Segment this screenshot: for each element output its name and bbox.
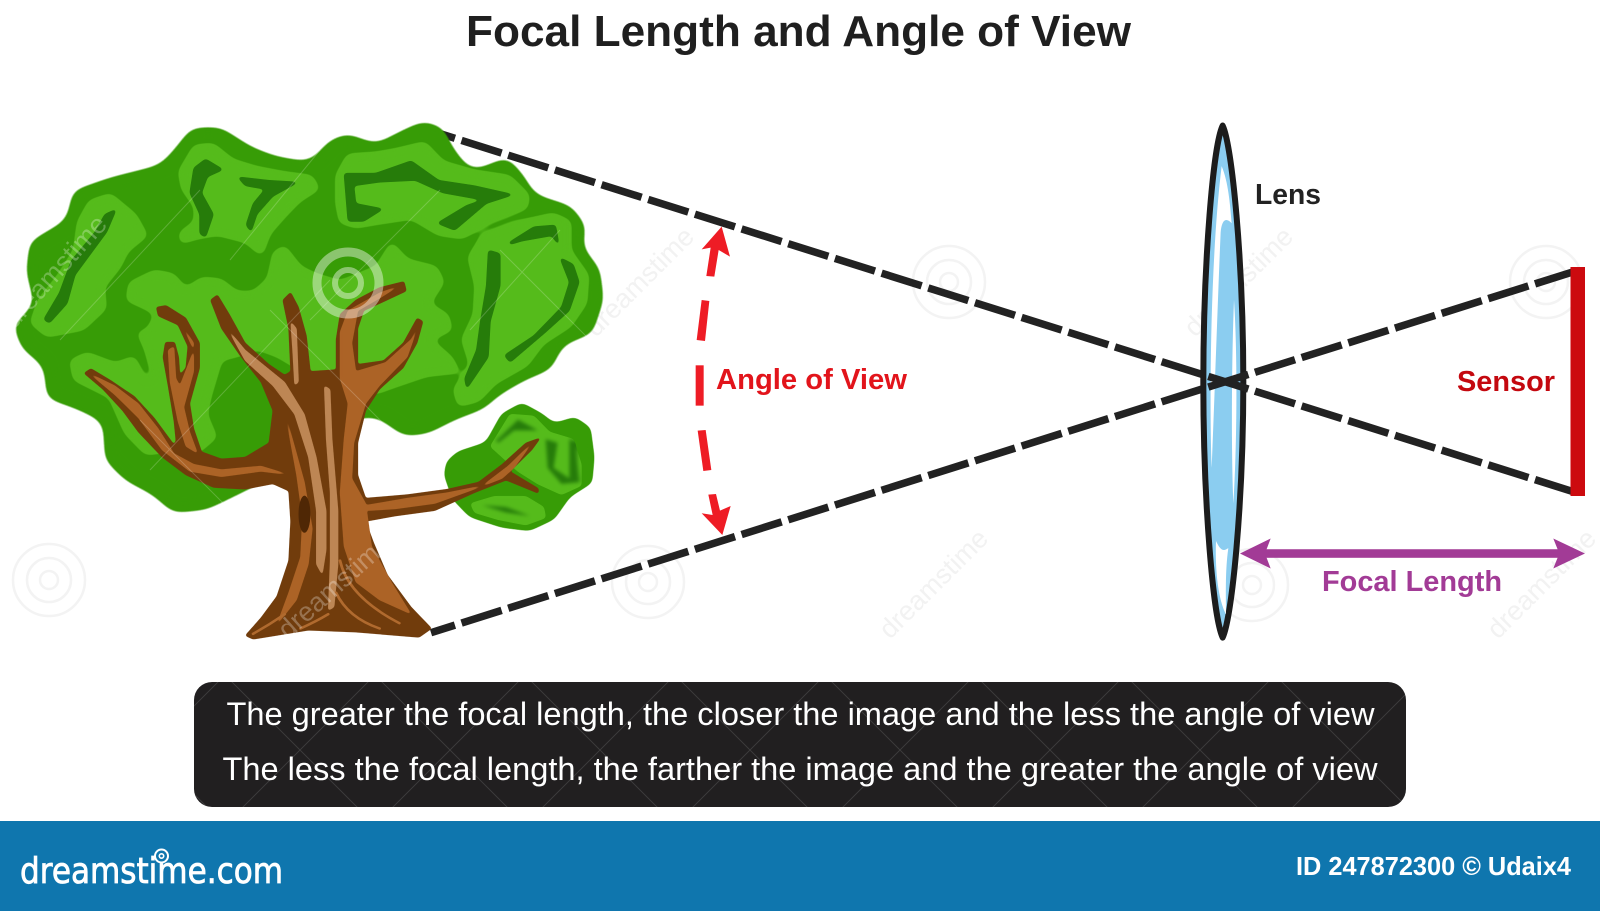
trunk and branches: [84, 281, 541, 639]
label: lens: Lens: [1255, 178, 1321, 210]
caption line 1: The greater the focal length, the closer the image and the less the angle of view: [226, 695, 1375, 732]
trunk knot: [299, 496, 310, 533]
sensor bar: [1570, 267, 1585, 496]
watermark text on background: dreamstime: [579, 221, 700, 342]
dashed ray: tree base to lens: [431, 388, 1205, 633]
logo spiral: [155, 850, 168, 862]
footer banner: [0, 821, 1600, 911]
watermark spiral on tree: [317, 252, 379, 314]
trunk: mid brown highlights: [89, 286, 534, 625]
banner background: [0, 821, 1600, 911]
watermarks on background: [13, 246, 1582, 621]
small canopy: light and dark patches: [471, 414, 581, 525]
trunk: base roots: [253, 561, 399, 634]
label: focal length: Focal Length: [1322, 566, 1502, 598]
dashed ray: lens to sensor top: [1208, 272, 1572, 387]
caption panel: [194, 682, 1406, 807]
watermark text on background: dreamstime: [1178, 221, 1299, 342]
watermark text on background: dreamstime: [1481, 523, 1600, 644]
focal length arrow: [1240, 539, 1585, 569]
caption line 2: The less the focal length, the farther the image and the greater the angle of view: [222, 750, 1378, 787]
lens body: [1203, 126, 1243, 637]
watermark text on background: [579, 221, 1600, 644]
dashed ray: lens to sensor bottom: [1208, 376, 1572, 491]
trunk: light stripes: [227, 321, 338, 611]
watermark text on tree: dreamstime: [272, 528, 397, 644]
logo text: dreamstime.com: [20, 851, 283, 892]
tree: [10, 118, 607, 639]
canopy: dark folds: [43, 159, 579, 389]
angle of view arrow: [696, 227, 731, 535]
watermark text on background: dreamstime: [873, 523, 994, 644]
title: Focal Length and Angle of View: [466, 7, 1132, 56]
caption lattice: [194, 682, 1406, 807]
dashed ray: tree top to lens: [441, 134, 1205, 375]
watermark text on tree: [0, 209, 397, 644]
canopy: light patches: [30, 141, 589, 455]
label: sensor: Sensor: [1457, 366, 1555, 398]
lens: [1203, 126, 1243, 637]
label: angle of view: Angle of View: [716, 364, 907, 396]
image id: ID 247872300 © Udaix4: [1296, 853, 1572, 881]
canopy: main foliage: [10, 118, 607, 516]
watermark lines on tree: [60, 150, 600, 540]
caption background: [194, 682, 1406, 807]
lens highlights: [1211, 166, 1236, 614]
small canopy: [442, 401, 596, 533]
